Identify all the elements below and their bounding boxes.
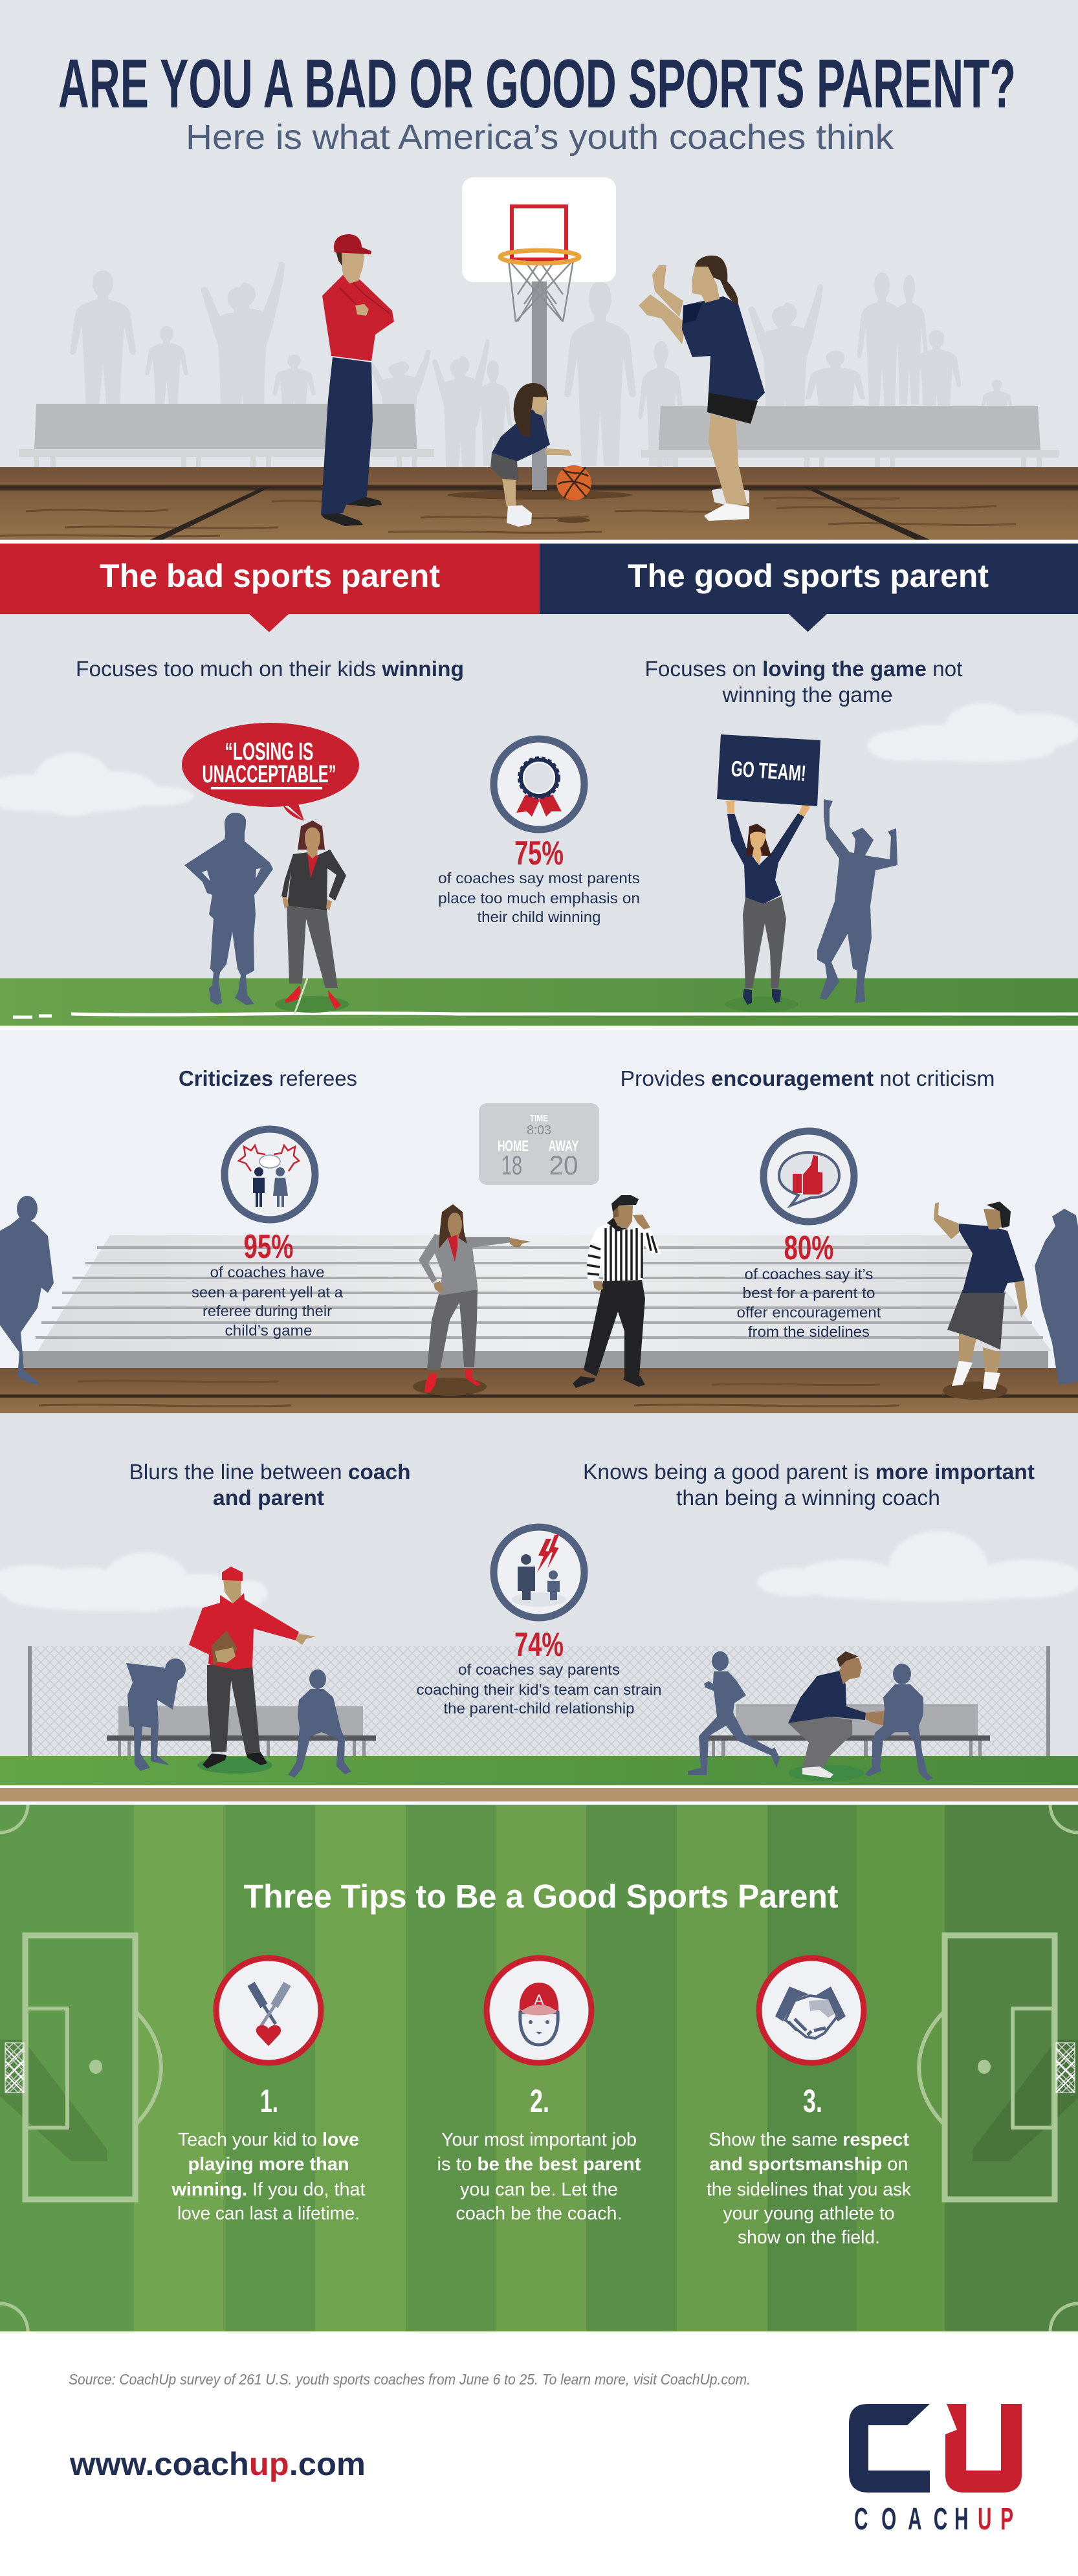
heading: good winning <box>644 657 963 707</box>
bench right <box>708 1704 990 1756</box>
icon: kid in cap: A <box>534 1992 544 2008</box>
icon: bats and heart <box>216 1958 321 2063</box>
scoreboard: 18 <box>501 1150 522 1180</box>
stat text: 75 percent: place too much emphasis on <box>438 890 640 907</box>
tip text 1: Teach your kid to love <box>178 2130 359 2150</box>
panel: footer <box>0 2331 1078 2576</box>
stat text: 95 percent: referee during their <box>203 1303 332 1319</box>
logo: CoachUp: COACH <box>854 2502 968 2537</box>
scoreboard: HOME <box>498 1138 529 1155</box>
panel: coach comparison <box>0 1415 1078 1805</box>
band: good sports parent <box>540 544 1078 632</box>
figure: referee <box>573 1195 661 1388</box>
speech bubble: losing is unacceptable: UNACCEPTABLE” <box>202 761 336 788</box>
tip text 3 <box>707 2130 911 2248</box>
cloud left <box>0 1552 267 1612</box>
website url: www.coachup.com <box>69 2446 366 2482</box>
silhouette: spectator right <box>1035 1209 1078 1385</box>
panel: hero court scene <box>0 0 1078 544</box>
tip text 2: Your most important job <box>441 2130 637 2150</box>
icon: kid in cap <box>487 1958 591 2063</box>
tip 2 <box>437 1958 641 2224</box>
tip text 2: coach be the coach. <box>456 2203 622 2224</box>
icon: handshake <box>759 1958 864 2063</box>
heading: encouragement: Provides encouragement not criticism <box>620 1066 995 1090</box>
grandstand <box>19 1235 1051 1368</box>
band: bad sports parent <box>0 544 540 632</box>
chain link fence <box>28 1646 1050 1756</box>
silhouette: spectator left <box>0 1196 54 1385</box>
cloud right <box>757 1531 1078 1602</box>
basketball hoop <box>462 177 616 490</box>
heading: criticizes: Criticizes referees <box>179 1066 357 1090</box>
bench right <box>641 406 1059 479</box>
stat: 80 percent: 80% <box>784 1229 833 1267</box>
number 2: 2. <box>530 2083 549 2119</box>
scoreboard: 20 <box>549 1150 578 1180</box>
pitch markings left <box>0 1805 161 2331</box>
panel: winning comparison <box>0 614 1078 1030</box>
tip text 3: Show the same respect <box>709 2130 909 2150</box>
subtitle: Here is what America’s youth coaches think <box>186 118 894 157</box>
source note: Source: CoachUp survey of 261 U.S. youth sports coaches from June 6 to 25. To learn more, visit CoachUp.com. <box>69 2371 751 2388</box>
tip 3 <box>707 1958 911 2248</box>
stat: 74 percent: 74% <box>514 1626 564 1664</box>
basketball <box>556 465 591 500</box>
heading: three tips: Three Tips to Be a Good Sports Parent <box>243 1878 839 1915</box>
tip text 3: show on the field. <box>738 2227 880 2248</box>
stat: 95 percent: 95% <box>243 1228 294 1266</box>
tip text 1: winning. If you do, that <box>171 2179 365 2200</box>
scoreboard <box>479 1103 599 1185</box>
figure: kneeling father <box>788 1651 885 1781</box>
stat text: 80 percent: from the sidelines <box>748 1323 870 1340</box>
figure: supportive mother <box>639 256 765 521</box>
stat text: 95 percent: child’s game <box>225 1322 312 1339</box>
number 1: 1. <box>260 2083 278 2119</box>
icon: yelling parents <box>225 1129 315 1220</box>
stat text: 74 percent: the parent-child relationship <box>444 1700 634 1717</box>
tip text 1: playing more than <box>188 2154 349 2175</box>
cloud left <box>0 753 194 816</box>
panel: referee comparison <box>0 1030 1078 1415</box>
wood floor <box>0 467 1078 544</box>
icon: award ribbon badge <box>494 739 584 830</box>
stat text: 80 percent: of coaches say it’s <box>744 1266 874 1282</box>
stat text: 75 percent: of coaches say most parents <box>438 870 640 886</box>
tip text 3: your young athlete to <box>723 2203 894 2224</box>
heading: more important: Knows being a good parent is more important <box>583 1460 1035 1484</box>
stat text: 74 percent: of coaches say parents <box>458 1661 620 1678</box>
scoreboard: 8:03 <box>527 1123 551 1138</box>
heading: coach and parent <box>129 1460 410 1510</box>
silhouette: standing kid <box>865 1664 933 1781</box>
stat: 75 percent: 75% <box>514 835 564 872</box>
bench left <box>107 1706 376 1756</box>
silhouette: sitting kid <box>288 1669 351 1778</box>
stat text: 75 percent: their child winning <box>478 908 600 925</box>
heading: more important: than being a winning coach <box>676 1486 940 1510</box>
tip text 2: you can be. Let the <box>460 2179 618 2200</box>
figure: bad mother in blazer <box>275 820 349 1014</box>
logo: CoachUp <box>849 2404 1022 2537</box>
tip text 3: the sidelines that you ask <box>707 2179 911 2200</box>
figure: yelling mother <box>413 1204 531 1396</box>
gym floor <box>0 1368 1078 1415</box>
stat text: 74 percent <box>417 1661 661 1717</box>
stat text: 80 percent: offer encouragement <box>736 1304 881 1321</box>
heading: more important <box>583 1460 1035 1510</box>
scoreboard: TIME <box>530 1113 548 1124</box>
number 3: 3. <box>803 2083 822 2119</box>
tip text 1: love can last a lifetime. <box>177 2203 360 2224</box>
grass <box>0 978 1078 1030</box>
tip text 2 <box>437 2130 641 2224</box>
silhouette: parent left <box>184 813 273 1005</box>
stat text: 80 percent <box>736 1266 881 1340</box>
stat text: 95 percent: seen a parent yell at a <box>192 1284 343 1301</box>
heading: coach and parent: Blurs the line between coach <box>129 1460 410 1484</box>
cloud right <box>867 703 1078 762</box>
tip text 1 <box>171 2130 365 2224</box>
tip 1 <box>171 1958 365 2224</box>
band: bad sports parent: The bad sports parent <box>100 558 440 594</box>
heading: coach and parent: and parent <box>213 1486 324 1510</box>
band: good sports parent: The good sports parent <box>628 558 989 594</box>
icon: parent child tension <box>494 1527 584 1618</box>
panel: section band headers <box>0 544 1078 632</box>
figure: pushy coach <box>189 1567 316 1774</box>
stat text: 95 percent: of coaches have <box>210 1264 325 1281</box>
sign: go team <box>717 734 820 806</box>
stat text: 95 percent <box>192 1264 343 1339</box>
figure: coach father <box>321 234 394 526</box>
icon: thumbs up bubble <box>764 1131 854 1222</box>
stat text: 80 percent: best for a parent to <box>743 1284 875 1301</box>
heading: good winning: winning the game <box>721 683 893 707</box>
silhouette: running kid <box>688 1651 780 1775</box>
logo: CoachUp: UP <box>978 2502 1013 2537</box>
grass and base path <box>0 1756 1078 1805</box>
tip text 3: and sportsmanship on <box>709 2154 908 2175</box>
stat text: 74 percent: coaching their kid’s team can strain <box>417 1681 661 1698</box>
bench left <box>19 404 434 478</box>
figure: encouraging father <box>934 1202 1028 1400</box>
silhouette: bending kid <box>126 1658 186 1771</box>
panel: three tips soccer field <box>0 1805 1078 2331</box>
scoreboard: AWAY <box>549 1138 578 1155</box>
heading: good winning: Focuses on loving the game not <box>644 657 963 681</box>
speech bubble: losing is unacceptable <box>182 723 359 820</box>
speech bubble: losing is unacceptable: “LOSING IS <box>225 738 313 765</box>
heading: bad winning: Focuses too much on their kids winning <box>76 657 464 681</box>
tip text 2: is to be the best parent <box>437 2154 641 2175</box>
crowd silhouettes <box>70 262 1013 479</box>
figure: child with ball <box>447 383 632 527</box>
pitch markings right <box>919 1805 1078 2331</box>
sign: go team: GO TEAM! <box>731 756 807 786</box>
field stripes <box>0 1805 1078 2331</box>
stat text: 75 percent <box>438 870 640 925</box>
silhouette: parent right <box>817 799 897 1003</box>
figure: good mother with sign <box>725 801 810 1012</box>
